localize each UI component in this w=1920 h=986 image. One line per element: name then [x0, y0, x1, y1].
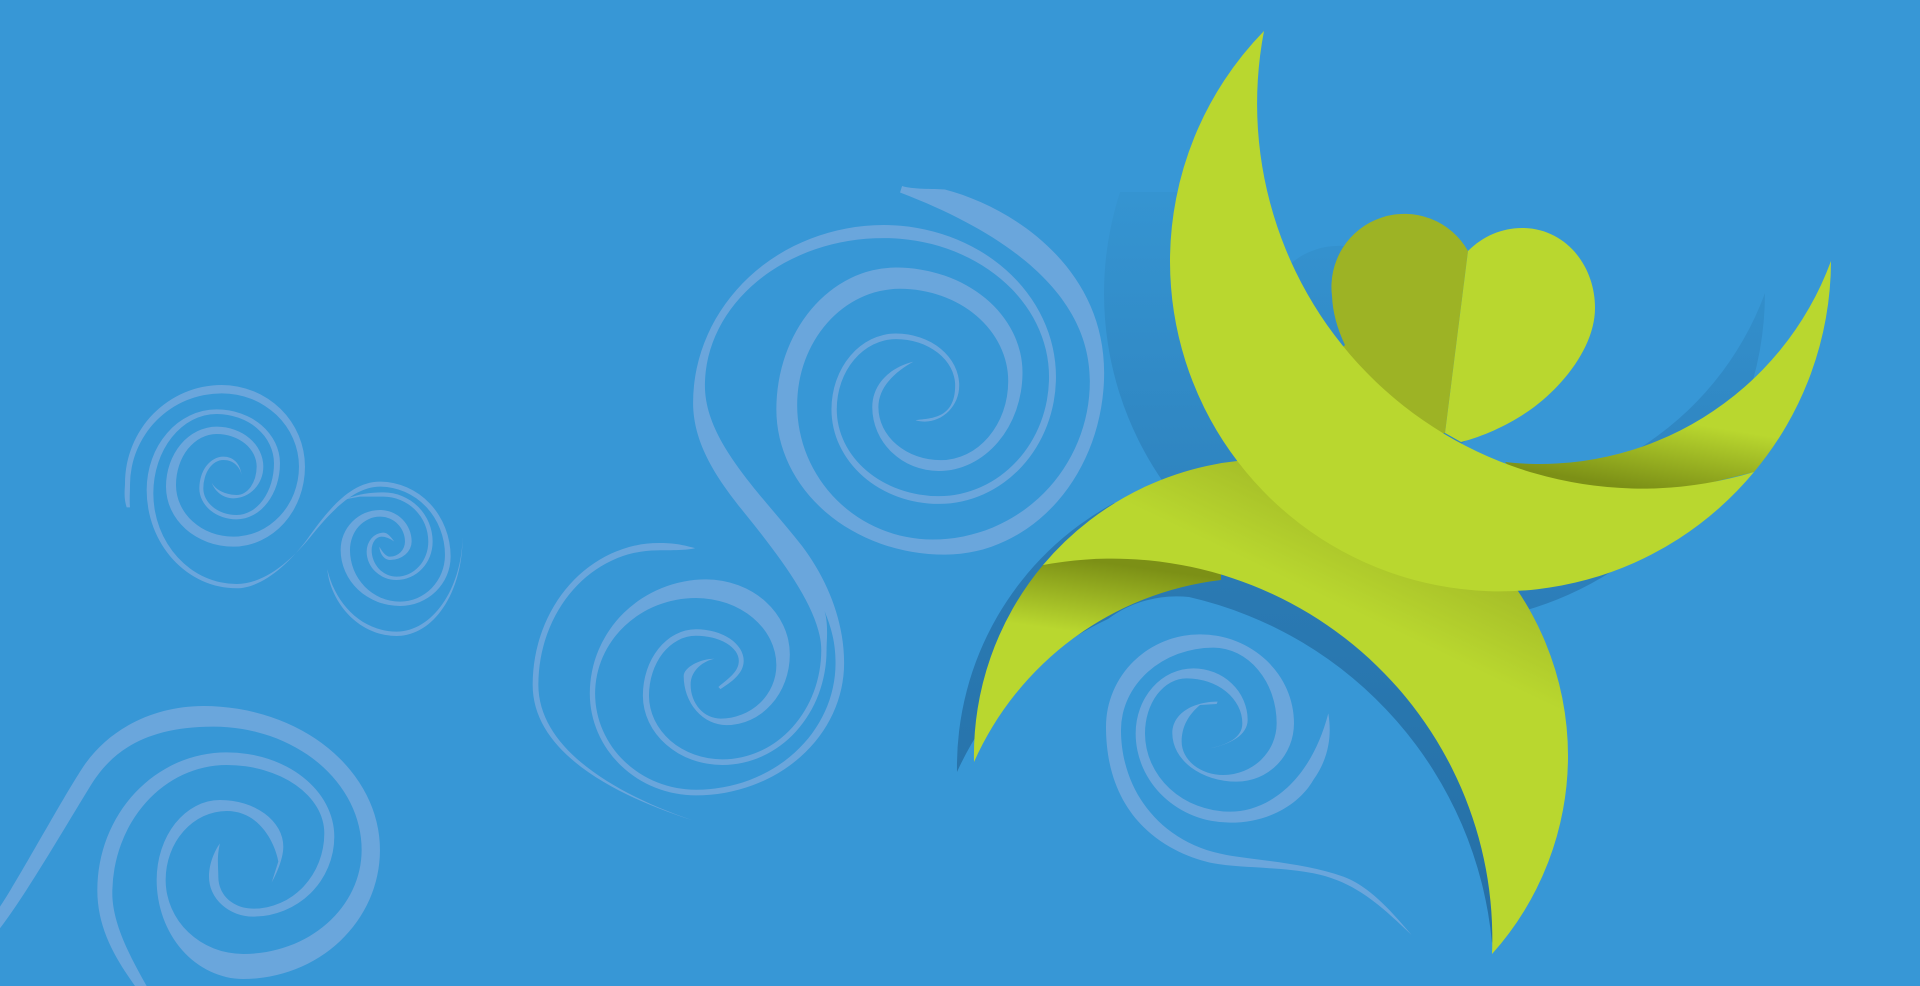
swirl: connecting S band	[147, 409, 451, 606]
figure: green dancing person	[957, 31, 1831, 954]
swirl: left spiral outer ribbon	[125, 385, 305, 547]
swirl: inner coil	[97, 752, 334, 986]
right arm fold	[1505, 261, 1831, 520]
leg crescent	[1043, 459, 1568, 954]
left arm fold	[974, 540, 1221, 762]
soft shadow of the raised arm	[1642, 294, 1765, 446]
swirl: large centre S-curve	[533, 186, 1104, 823]
soft shadow of the torso	[1104, 249, 1610, 610]
swirl: small left double spiral	[125, 385, 463, 636]
swirl: S band joining both spirals	[590, 225, 1056, 795]
swirl: right spiral thin inner line	[345, 492, 433, 580]
head: shaded half	[1330, 214, 1468, 440]
swirl: lower spiral outer ribbon	[533, 543, 700, 823]
swirl: upper spiral outer ribbon	[776, 186, 1104, 555]
soft shadow of the head	[1292, 249, 1465, 444]
swirl: outer band rising from the left edge	[0, 706, 380, 979]
hard shadow of the lower crescent	[957, 503, 1530, 943]
figure soft shadow	[1104, 249, 1765, 610]
swirl: inner coil	[1136, 668, 1330, 823]
swirl: right spiral outer ribbon	[327, 537, 463, 636]
swirl: tail ribbon	[1106, 634, 1412, 935]
head: light half	[1445, 228, 1595, 442]
swirl: spiral below the figure	[1106, 634, 1412, 935]
swirl: bottom left large spiral	[0, 706, 380, 986]
main torso crescent	[1170, 31, 1754, 591]
